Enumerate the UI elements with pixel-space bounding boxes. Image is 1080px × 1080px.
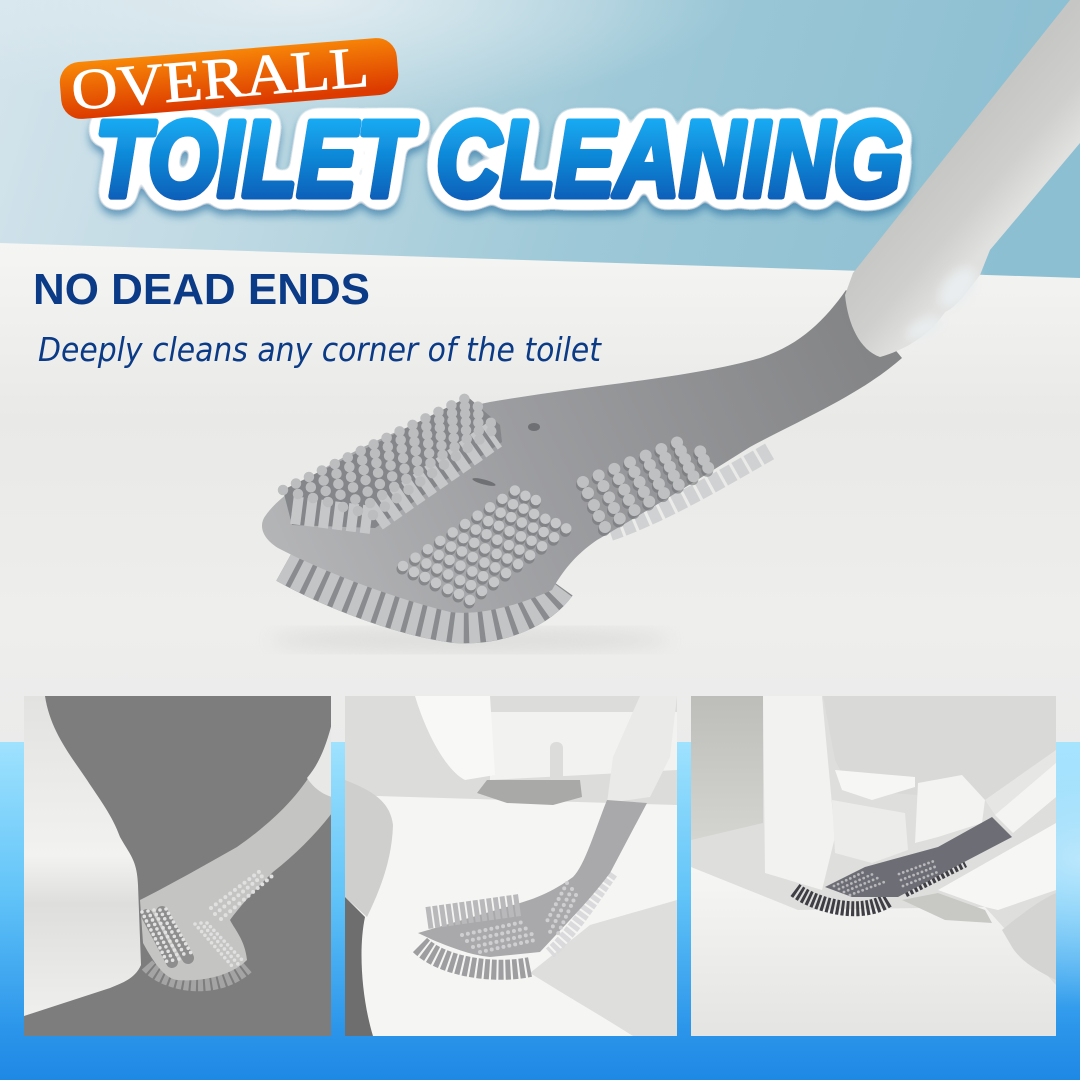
brush underside bristles [285, 450, 772, 625]
photo 1: brush against toilet base on grey floor [24, 696, 332, 1036]
hinge top bracket [835, 770, 915, 800]
subheading: NO DEAD ENDS: NO DEAD ENDS [33, 265, 370, 314]
brush head [825, 817, 1012, 897]
metal hinge ring [477, 780, 582, 805]
white handle [607, 696, 677, 803]
bristle block 3 [582, 437, 713, 530]
second hinge [915, 775, 985, 843]
badge: OVERALL: OVERALL [69, 34, 371, 123]
shadow under brush [270, 628, 670, 652]
dark bristles [795, 890, 888, 909]
background: blue lower band [0, 742, 1080, 1080]
right white deck [938, 823, 1056, 910]
toilet base [24, 696, 141, 1016]
handle highlight thumb rest [903, 261, 984, 345]
underside bristles [420, 945, 530, 970]
dark floor gap [345, 897, 373, 1036]
brush holes [472, 423, 540, 488]
brush handle and head [140, 723, 332, 980]
bristle block 1 [283, 397, 502, 528]
bristle blocks [427, 883, 576, 952]
brush head and neck [418, 800, 647, 957]
photo 3: brush under toilet seat hinge [691, 696, 1056, 1036]
white upper handle [307, 723, 332, 797]
toilet rim [345, 795, 677, 1036]
raised toilet seat panel [763, 696, 835, 890]
toilet seat hinge [415, 696, 495, 780]
description text: Deeply cleans any corner of the toilet [38, 330, 602, 369]
heading group [58, 32, 903, 219]
left wall [691, 696, 763, 840]
inner bowl [530, 900, 677, 1036]
bowl opening [1002, 893, 1056, 980]
handle neck [262, 290, 902, 613]
photo 2: brush under toilet rim [345, 696, 677, 1036]
bristle block 2 [402, 487, 568, 603]
bristle blocks [834, 861, 940, 895]
white handle [845, 0, 1080, 357]
hinge cylinder [832, 800, 908, 863]
title: TOILET CLEANING: TOILET CLEANING [95, 98, 903, 219]
background: white counter surface [0, 243, 1080, 745]
gap under deck [902, 893, 992, 923]
product: toilet brush [262, 0, 1080, 652]
right upper light area [990, 756, 1048, 796]
bristles below head [147, 965, 247, 984]
rear tank panel [490, 712, 677, 780]
seat back region [823, 696, 1056, 800]
left grey lobe [345, 780, 393, 917]
bristle blocks [142, 871, 272, 966]
seat post [550, 742, 563, 777]
background: sky blue wall [0, 0, 1080, 290]
white handle [995, 763, 1056, 833]
toilet deck [691, 867, 1056, 1016]
